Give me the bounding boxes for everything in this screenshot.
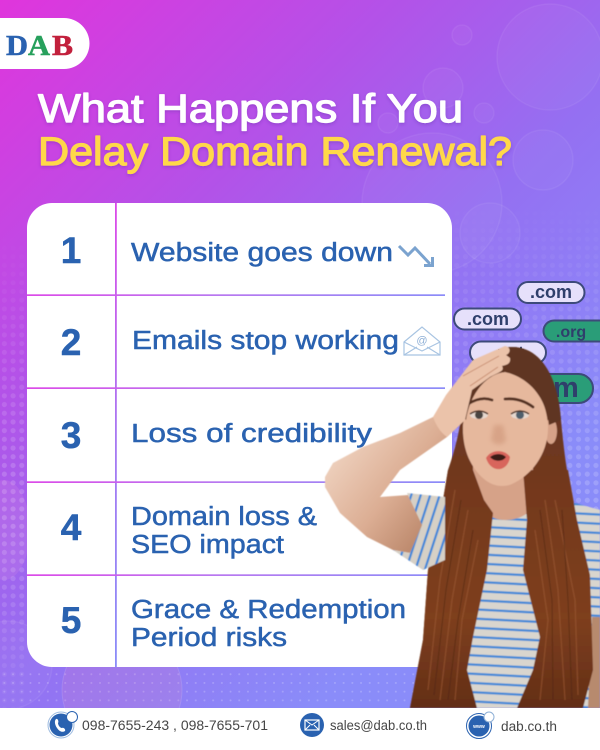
logo pill: A	[28, 30, 50, 62]
pill: .net: .net	[492, 343, 524, 363]
row 3 label: Loss of credibility	[131, 420, 372, 448]
row 5 label: Period risks	[131, 624, 287, 652]
back hair	[410, 347, 593, 708]
row 2 label: Emails stop working	[132, 327, 399, 355]
row 5 label	[61, 596, 406, 652]
website address: dab.co.th	[501, 719, 557, 734]
row 3 label: 3	[61, 415, 81, 456]
pill: large .com: .com	[511, 372, 579, 404]
ear	[545, 418, 557, 444]
right skin arm	[588, 617, 600, 708]
row 1 label	[61, 230, 393, 271]
logo pill	[0, 18, 90, 69]
right long hair	[517, 470, 593, 708]
row 1 label: Website goes down	[131, 239, 393, 267]
face	[463, 372, 548, 486]
left long hair	[410, 470, 493, 708]
logo pill: D	[6, 30, 28, 62]
row 4 label: 4	[61, 507, 82, 548]
pill: .com lower: .com	[467, 309, 509, 329]
row 3 label	[61, 415, 372, 456]
row 5 label: 5	[61, 600, 81, 641]
panel: table of consequences	[27, 203, 452, 667]
shirt torso	[425, 500, 600, 708]
brows	[468, 399, 533, 407]
hand	[433, 346, 510, 437]
icon: mail	[300, 713, 324, 737]
footer bar	[0, 708, 600, 750]
icon: open envelope with at sign: @	[416, 335, 428, 347]
title: What Happens If You	[38, 87, 463, 131]
email address: sales@dab.co.th	[330, 718, 427, 733]
right sleeve	[573, 503, 600, 617]
row 4 label: SEO impact	[131, 531, 284, 559]
row 1 label: 1	[61, 230, 81, 271]
finger creases	[463, 356, 499, 386]
title	[38, 87, 512, 174]
pill: .com lower	[454, 308, 521, 330]
icon: phone	[48, 712, 78, 738]
row 4 label: Domain loss &	[131, 503, 317, 531]
row 2 label	[61, 322, 399, 363]
title: Delay Domain Renewal?	[38, 130, 512, 174]
icon: website	[466, 712, 494, 738]
person: worried woman holding her head	[325, 346, 600, 708]
row 5 label: Grace & Redemption	[131, 596, 406, 624]
hair strands	[428, 490, 578, 700]
row 4 label	[61, 503, 317, 559]
logo pill: B	[52, 30, 73, 62]
pill: .org	[544, 320, 600, 342]
left sleeve	[393, 493, 445, 570]
neck	[473, 462, 533, 520]
pill: .org: .org	[556, 324, 586, 341]
pill: .com upper	[518, 282, 584, 303]
arm	[325, 417, 460, 553]
icon: open envelope with at sign	[404, 327, 440, 355]
row 2 label: 2	[61, 322, 81, 363]
nose shadow	[491, 425, 506, 444]
icon: downward trend arrow	[399, 246, 432, 266]
eyes	[470, 411, 529, 419]
phone numbers: 098-7655-243 , 098-7655-701	[82, 718, 268, 733]
pill: .com upper: .com	[530, 282, 572, 302]
domain pills	[454, 282, 600, 404]
icon: website: www	[472, 724, 485, 730]
front hair	[462, 347, 561, 425]
mouth	[486, 451, 510, 469]
pill: .net	[470, 342, 546, 364]
